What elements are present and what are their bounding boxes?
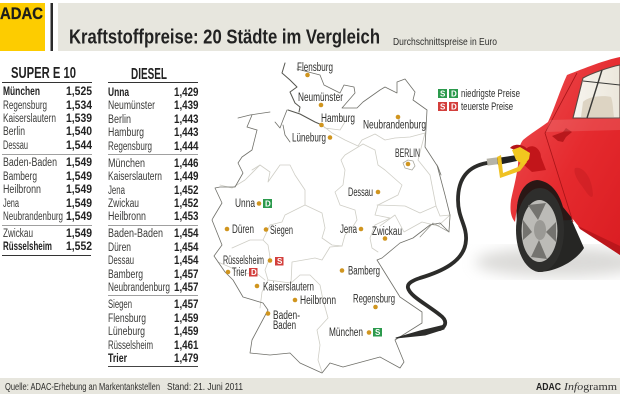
table: Diesel: 1,444: [174, 141, 199, 153]
table: Diesel: 1,443: [174, 114, 198, 126]
map labels and city markers: Heilbronn: [300, 295, 336, 307]
map labels and city markers: BERLIN: [395, 148, 420, 160]
table: Super E 10: 1,552: [66, 241, 92, 253]
date note: Stand: 21. Juni 2011: [167, 382, 243, 393]
table: Diesel: Jena: [108, 185, 125, 197]
table: Super E 10: 1,549: [66, 157, 92, 169]
table: Diesel: 1,446: [174, 158, 198, 170]
footer band: [0, 378, 620, 394]
table: Diesel: Neubrandenburg: [108, 282, 170, 294]
table: Super E 10: 1,549: [66, 228, 92, 240]
wheel arch: [516, 178, 572, 222]
table: Super E 10: Regensburg: [3, 100, 47, 112]
table: Super E 10: München: [3, 86, 40, 98]
map of Germany: [212, 63, 450, 373]
legend: S: [440, 102, 446, 112]
table: Diesel: 1,452: [174, 198, 198, 210]
map labels and city markers: Dessau: [348, 187, 373, 199]
tire tread: [538, 190, 584, 272]
table: Diesel: 1,457: [174, 282, 198, 294]
credit: ADAC Infogramm: ADAC: [536, 382, 561, 393]
table: Diesel: Baden-Baden: [108, 228, 163, 240]
highlight: [546, 118, 620, 132]
map labels and city markers: Neubrandenburg: [363, 120, 426, 132]
table: Diesel: 1,457: [174, 269, 198, 281]
map labels and city markers: Baden-: [273, 310, 300, 322]
table: Diesel: 1,459: [174, 326, 198, 338]
table: Diesel: Unna: [108, 87, 129, 99]
table: Diesel: Lüneburg: [108, 326, 145, 338]
map labels and city markers: D: [251, 268, 257, 277]
table: Diesel: 1,457: [174, 299, 198, 311]
table: Super E 10: [2, 65, 93, 256]
body: [510, 57, 620, 255]
table: Super E 10: Berlin: [3, 126, 25, 138]
table: Super E 10: 1,549: [66, 171, 92, 183]
map labels and city markers: Rüsselsheim: [223, 255, 264, 267]
table: Super E 10: Baden-Baden: [3, 157, 57, 169]
map labels and city markers: Bamberg: [348, 266, 380, 278]
table: Diesel: 1,454: [174, 228, 199, 240]
table: Diesel: Zwickau: [108, 198, 139, 210]
table: Diesel: Hamburg: [108, 127, 144, 139]
legend: D: [451, 90, 457, 98]
map labels and city markers: Jena: [340, 224, 357, 236]
table: Diesel: Trier: [108, 353, 127, 365]
table: Diesel: Rüsselsheim: [108, 340, 153, 352]
legend: niedrigste Preise: [461, 88, 520, 100]
map labels and city markers: Flensburg: [297, 62, 333, 74]
table: Diesel: 1,479: [174, 353, 198, 365]
legend: teuerste Preise: [461, 101, 513, 113]
fuel flap: [524, 146, 546, 172]
hose: [396, 163, 487, 338]
door handle: [552, 128, 572, 142]
table: Super E 10: 1,549: [66, 184, 92, 196]
table: Super E 10: Neubrandenburg: [3, 211, 63, 223]
map labels and city markers: Unna: [235, 198, 255, 210]
table: Diesel: 1,452: [174, 185, 198, 197]
table: Super E 10: Rüsselsheim: [3, 241, 52, 253]
table: Diesel: Kaiserslautern: [108, 171, 162, 183]
table: Diesel: Berlin: [108, 114, 131, 126]
map labels and city markers: Regensburg: [353, 294, 395, 306]
table: Super E 10: Kaiserslautern: [3, 113, 56, 125]
table: Diesel: Düren: [108, 242, 131, 254]
table: Diesel: Flensburg: [108, 313, 146, 325]
source note: Quelle: ADAC-Erhebung an Markentankstellen: [5, 382, 160, 393]
table: Diesel: 1,459: [174, 313, 198, 325]
table: Super E 10: 1,549: [66, 211, 92, 223]
table: Super E 10: 1,544: [66, 140, 93, 152]
table: Diesel: DIESEL: [131, 66, 167, 83]
table: Super E 10: Jena: [3, 198, 19, 210]
legend: [438, 88, 520, 113]
table: Diesel: 1,449: [174, 171, 198, 183]
table: Super E 10: Bamberg: [3, 171, 37, 183]
map labels and city markers: Baden: [273, 320, 296, 332]
table: Diesel: 1,454: [174, 255, 199, 267]
fuel nozzle: [487, 147, 530, 178]
seat: [581, 96, 614, 117]
map labels and city markers: München: [329, 327, 363, 339]
credit: ADAC Infogramm: [536, 381, 617, 393]
credit: ADAC Infogramm: Infogramm: [563, 381, 617, 393]
map labels and city markers: Lüneburg: [292, 132, 326, 144]
table: Super E 10: 1,549: [66, 198, 92, 210]
map labels and city markers: S: [375, 328, 381, 337]
table: Diesel: 1,439: [174, 100, 198, 112]
map labels and city markers: Zwickau: [372, 226, 402, 238]
table: Diesel: Heilbronn: [108, 211, 146, 223]
logo: ADAC: [0, 3, 45, 51]
table: Diesel: 1,454: [174, 242, 199, 254]
table: Super E 10: 1,534: [66, 100, 93, 112]
map labels and city markers: Siegen: [270, 225, 293, 237]
shadow under car: [475, 247, 620, 277]
logo: ADAC: ADAC: [0, 4, 43, 23]
legend: S: [440, 90, 446, 98]
sill: [578, 226, 620, 255]
table: Diesel: Regensburg: [108, 141, 152, 153]
map labels and city markers: D: [265, 200, 271, 208]
table: Diesel: München: [108, 158, 145, 170]
map labels and city markers: Trier: [232, 267, 247, 279]
table: Diesel: 1,429: [174, 87, 198, 99]
window: [573, 65, 620, 118]
tire: [516, 188, 564, 272]
map labels and city markers: Kaiserslautern: [263, 282, 314, 294]
table: Super E 10: Dessau: [3, 140, 28, 152]
map labels and city markers: [223, 62, 426, 339]
header band: [58, 3, 620, 51]
table: Diesel: 1,453: [174, 211, 198, 223]
door line: [545, 73, 577, 222]
rim: [522, 200, 558, 262]
table: Super E 10: Heilbronn: [3, 184, 41, 196]
map labels and city markers: Neumünster: [298, 92, 343, 104]
map labels and city markers: S: [277, 257, 283, 266]
table: Diesel: Dessau: [108, 255, 134, 267]
table: Super E 10: SUPER E 10: [11, 65, 76, 82]
legend: D: [451, 102, 457, 112]
table: Diesel: Siegen: [108, 299, 132, 311]
table: Super E 10: 1,540: [66, 126, 92, 138]
map labels and city markers: Düren: [232, 224, 254, 236]
table: Diesel: [108, 66, 199, 367]
table: Diesel: 1,461: [174, 340, 199, 352]
map labels and city markers: Hamburg: [321, 113, 355, 125]
table: Super E 10: 1,525: [66, 86, 93, 98]
car: [510, 57, 620, 272]
state borders: [218, 117, 450, 372]
table: Diesel: 1,443: [174, 127, 198, 139]
subtitle: Durchschnittspreise in Euro: [393, 36, 497, 48]
table: Diesel: Bamberg: [108, 269, 143, 281]
outer borders: [282, 63, 322, 125]
title: Kraftstoffpreise: 20 Städte im Vergleich: [69, 26, 380, 48]
table: Super E 10: 1,539: [66, 113, 92, 125]
table: Diesel: Neumünster: [108, 100, 155, 112]
table: Super E 10: Zwickau: [3, 228, 33, 240]
